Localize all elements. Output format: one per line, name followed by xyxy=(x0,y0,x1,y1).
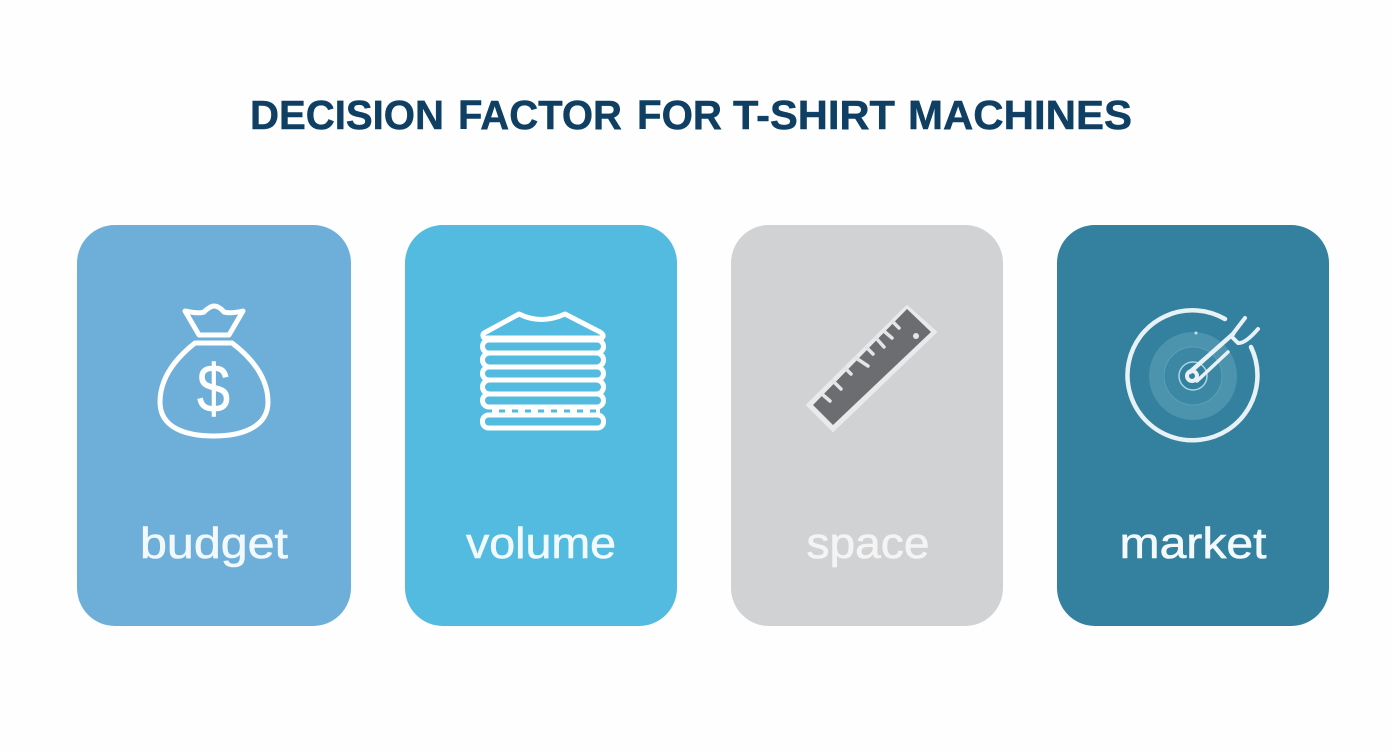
icon: money bag xyxy=(160,306,268,436)
panel: volume xyxy=(405,225,677,626)
title: MACHINES xyxy=(908,92,1132,138)
budget label: budget xyxy=(140,519,288,568)
volume label: volume xyxy=(466,519,616,568)
market label: market xyxy=(1120,519,1266,568)
budget dollar sign: $ xyxy=(197,351,230,427)
icon: target with dart xyxy=(1127,310,1258,440)
panel: budget xyxy=(77,225,351,626)
space label: space xyxy=(806,519,930,568)
title: FACTOR xyxy=(458,92,622,138)
icon: ruler xyxy=(807,306,936,431)
title xyxy=(250,92,1132,138)
title: FOR xyxy=(637,92,722,138)
icon: stacked shirts xyxy=(482,314,604,428)
panel: market xyxy=(1057,225,1329,626)
title: DECISION xyxy=(250,92,444,138)
title: T-SHIRT xyxy=(733,92,895,138)
panel: space xyxy=(731,225,1003,626)
